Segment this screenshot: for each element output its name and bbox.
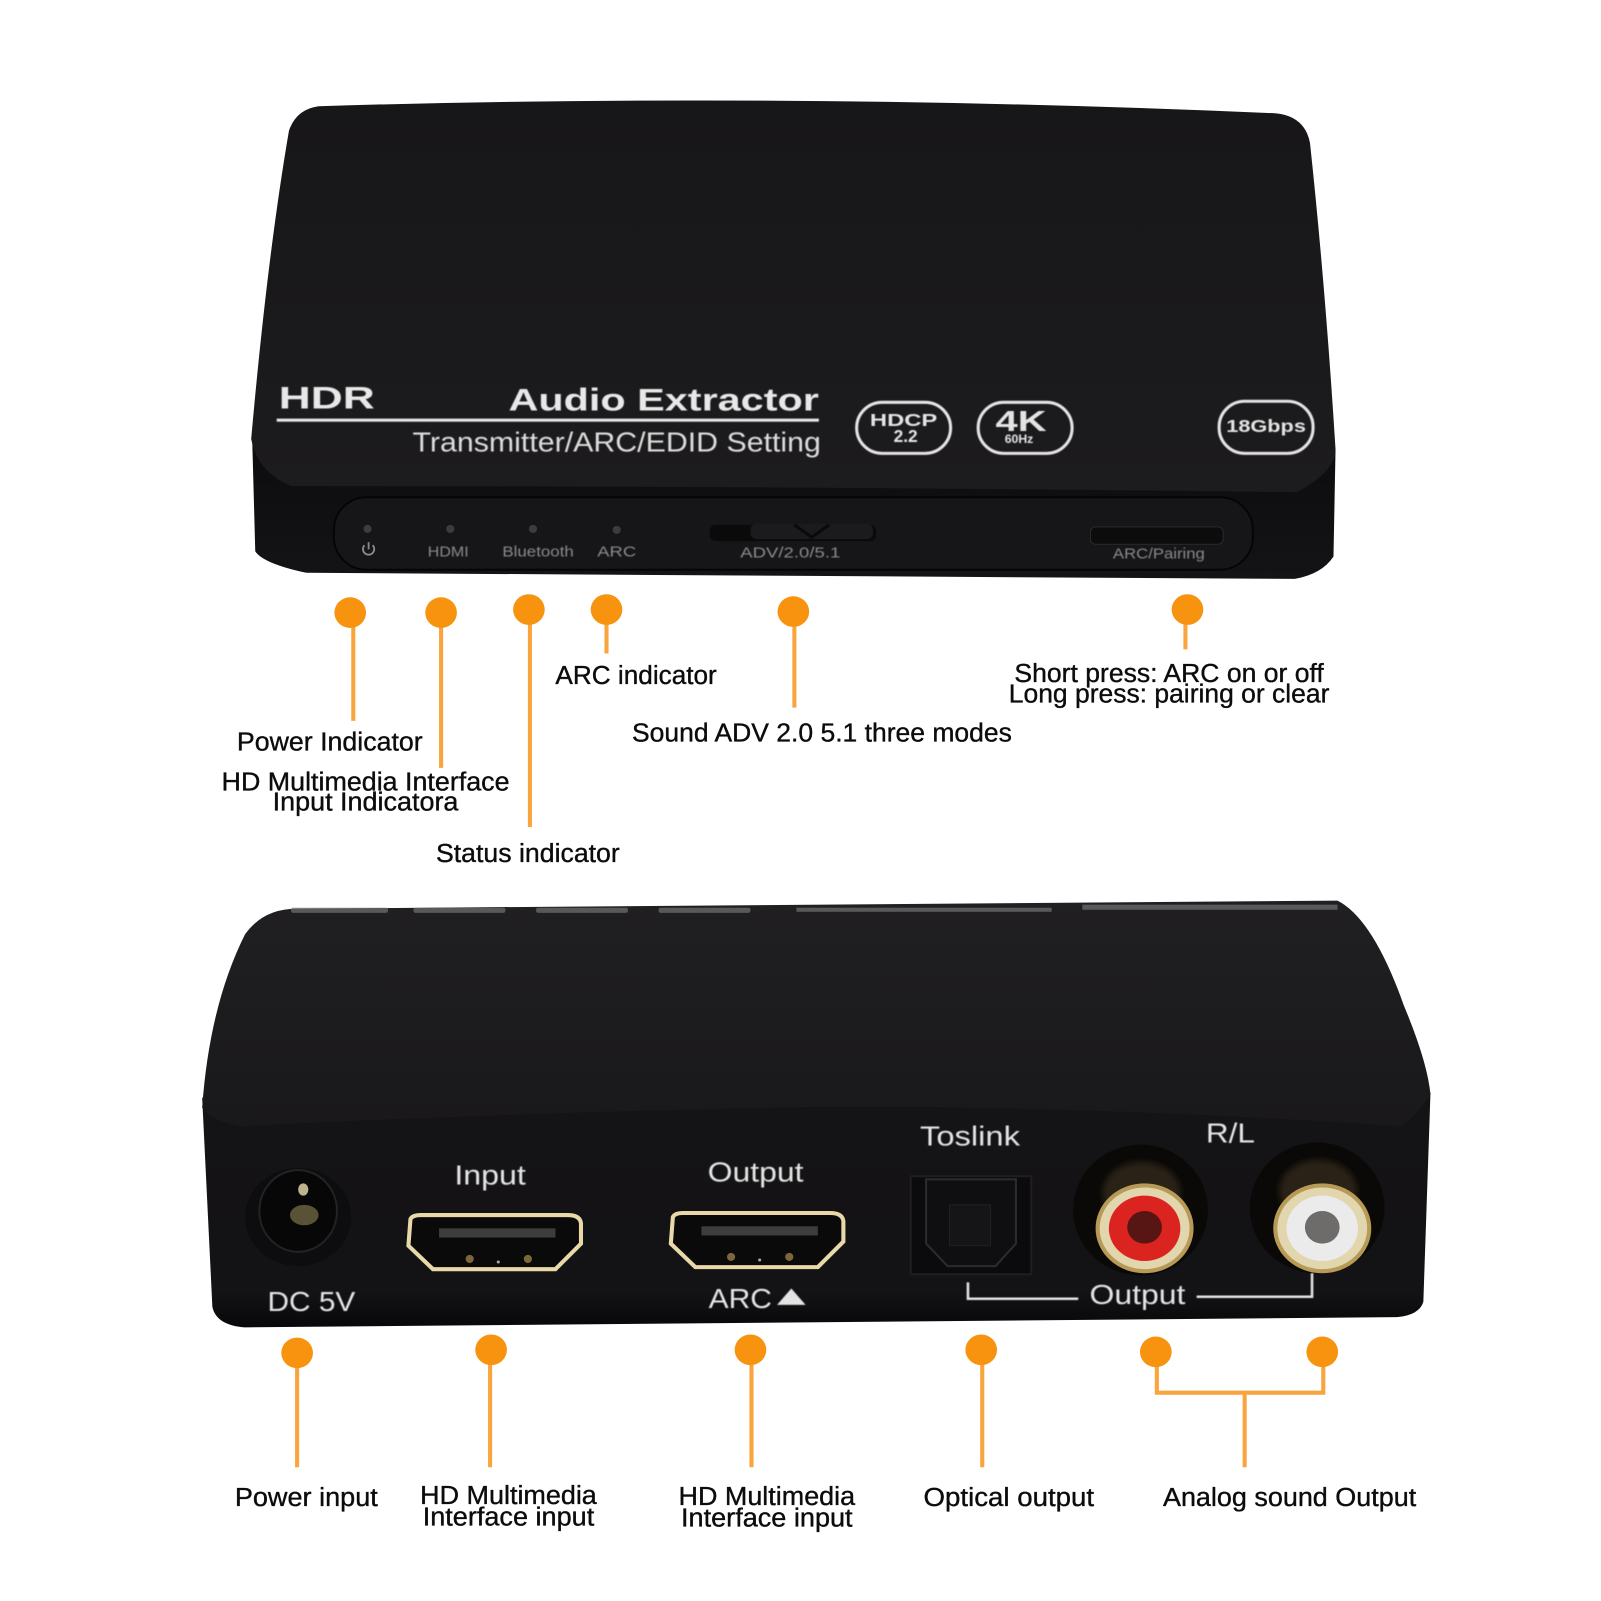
badge: 4K 60Hz: 4K (996, 406, 1047, 438)
callout: status indicator (436, 594, 620, 868)
panel labels: HDMI (428, 544, 469, 560)
callouts: bottom device (235, 1335, 1416, 1532)
HDMI output port (671, 1213, 843, 1267)
slider switch (710, 524, 876, 541)
rear panel labels: Output (708, 1156, 804, 1187)
callout: HD multimedia interface output (678, 1335, 856, 1532)
button panel (334, 497, 1253, 570)
panel labels: ARC/Pairing (1113, 547, 1205, 563)
badge: 18Gbps: 18Gbps (1226, 416, 1306, 436)
callout: power indicator: Power Indicator (237, 728, 423, 756)
bottom device: rear panel view (202, 901, 1430, 1327)
device rear face (202, 1093, 1430, 1327)
HDMI input port (408, 1215, 581, 1269)
rear panel labels (268, 1118, 1312, 1317)
rear panel labels: Toslink (920, 1121, 1020, 1152)
indicator LEDs (363, 525, 621, 534)
callout: sound modes (632, 596, 1012, 747)
rear panel labels: Input (454, 1159, 526, 1190)
callout: status indicator: Status indicator (436, 840, 620, 868)
callout: ARC / pairing button: Short press: ARC on or off (1014, 660, 1325, 688)
callout: HD multimedia interface input indicator: HD Multimedia Interface (222, 768, 510, 796)
callout: HD multimedia interface input indicator (222, 597, 510, 817)
device top surface (202, 901, 1430, 1126)
top device: front panel view (251, 100, 1336, 579)
callout: HD multimedia interface output: HD Multimedia (678, 1483, 856, 1511)
rear panel labels: Output (1089, 1279, 1186, 1310)
panel labels: ARC (597, 544, 636, 560)
callout: sound modes: Sound ADV 2.0 5.1 three modes (632, 719, 1012, 747)
callout: ARC / pairing button: Long press: pairing or clear (1009, 680, 1330, 708)
badge: 4K 60Hz: 60Hz (1005, 432, 1033, 446)
callout: power input (235, 1338, 378, 1512)
callout: analog sound output: Analog sound Output (1163, 1484, 1416, 1512)
badge: 18Gbps (1219, 401, 1313, 453)
DC jack (245, 1168, 351, 1266)
faint mirrored print on top edge (291, 905, 1338, 913)
badge: HDCP 2.2 (857, 402, 951, 453)
callout: optical output: Optical output (924, 1484, 1094, 1512)
callout: ARC indicator: ARC indicator (555, 662, 717, 690)
red RCA jack (1073, 1145, 1208, 1275)
rear panel labels: ARC (709, 1283, 772, 1314)
badge: 4K 60Hz (978, 402, 1072, 453)
rear panel labels: R/L (1206, 1118, 1255, 1149)
panel labels (428, 544, 1205, 563)
printed logo text (277, 379, 821, 457)
device body front (252, 439, 1336, 579)
printed logo text: HDR (279, 379, 375, 415)
icon: power symbol (363, 542, 374, 555)
badge: HDCP 2.2: 2.2 (894, 426, 918, 446)
rear panel labels: DC 5V (268, 1286, 356, 1317)
Toslink optical port (911, 1176, 1031, 1274)
badge: HDCP 2.2: HDCP (870, 410, 937, 430)
callout: power input: Power input (235, 1484, 378, 1512)
pairing button (1090, 527, 1223, 544)
callouts: top device (222, 594, 1330, 868)
printed logo text: Transmitter/ARC/EDID Setting (413, 426, 821, 457)
callout: HD multimedia interface input: HD Multimedia (420, 1482, 598, 1510)
callout: HD multimedia interface input (420, 1335, 598, 1531)
callout: ARC / pairing button (1009, 594, 1330, 708)
panel labels: ADV/2.0/5.1 (740, 545, 840, 561)
callout: HD multimedia interface output: Interface input (681, 1504, 853, 1532)
panel labels: Bluetooth (502, 544, 574, 560)
callout: analog sound output (1140, 1337, 1416, 1512)
device top surface (251, 100, 1336, 492)
callout: optical output (924, 1335, 1094, 1512)
callout: HD multimedia interface input indicator: Input Indicatora (273, 789, 459, 817)
callout: HD multimedia interface input: Interface input (423, 1503, 594, 1531)
callout: power indicator (237, 597, 423, 756)
printed logo text: Audio Extractor (508, 381, 819, 417)
white RCA jack (1250, 1143, 1385, 1273)
callout: ARC indicator (555, 594, 717, 690)
